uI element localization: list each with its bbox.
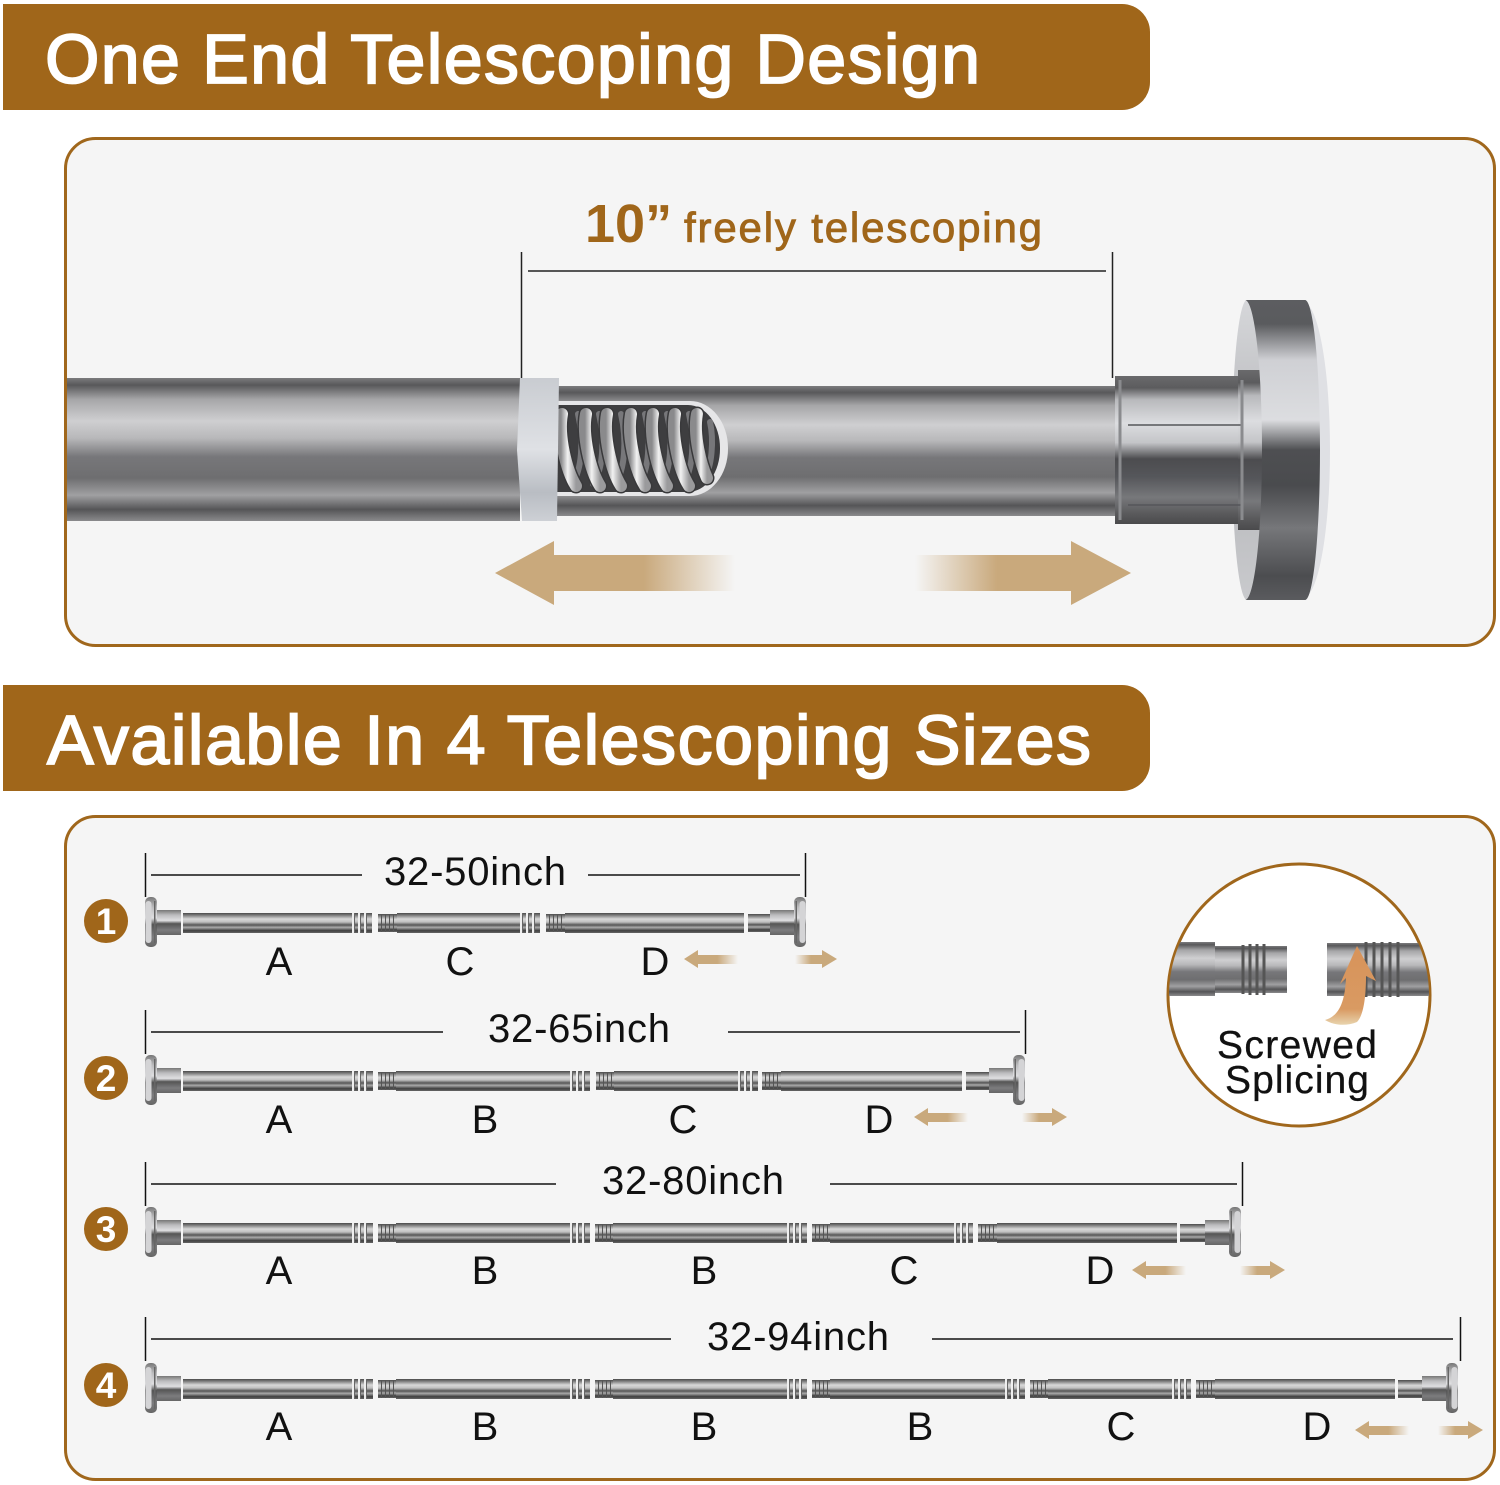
- header banner: Available In 4 Telescoping Sizes: Available In 4 Telescoping Sizes: [47, 701, 1091, 779]
- badge 3: [84, 1207, 128, 1251]
- part letters 4: B: [691, 1405, 717, 1449]
- dimension line 2: [146, 1007, 1026, 1054]
- part letters 4: D: [1303, 1405, 1331, 1449]
- dimension line 4: [146, 1315, 1460, 1361]
- panel: four sizes: [66, 816, 1494, 1480]
- size 4: 32-94 inch: [84, 1315, 1483, 1449]
- badge 2: [84, 1056, 128, 1100]
- part letters 4: A: [266, 1405, 293, 1449]
- part letters 4: [266, 1405, 1331, 1449]
- part letters 2: A: [266, 1098, 293, 1142]
- dimension line 1: 32-50inch: [384, 850, 566, 894]
- callout text: Screwed: [1217, 1024, 1377, 1067]
- callout text: [1217, 1024, 1377, 1102]
- part letters 3: [266, 1249, 1114, 1293]
- spring window: [557, 401, 728, 496]
- size 3: 32-80 inch: [84, 1159, 1285, 1293]
- callout: screwed splicing: [1165, 864, 1437, 1126]
- part letters 1: [266, 940, 669, 984]
- part letters 3: C: [890, 1249, 918, 1293]
- dimension bracket: [522, 252, 1112, 378]
- rod 2: [145, 1055, 1025, 1105]
- part letters 4: B: [472, 1405, 498, 1449]
- part letters 3: B: [691, 1249, 717, 1293]
- double arrow 1: [684, 950, 837, 968]
- rod 1: [145, 897, 806, 947]
- dimension line 4: 32-94inch: [707, 1315, 889, 1359]
- twist arrow: [1325, 946, 1376, 1025]
- badge 4: 4: [96, 1365, 117, 1406]
- part letters 1: A: [266, 940, 293, 984]
- telescoping label: 10”: [585, 194, 672, 254]
- double arrow 4: [1355, 1421, 1483, 1439]
- part letters 3: A: [266, 1249, 293, 1293]
- left arrow: [495, 541, 735, 605]
- part letters 4: B: [907, 1405, 933, 1449]
- double arrow 3: [1132, 1261, 1285, 1279]
- rod 4: [145, 1363, 1458, 1413]
- callout text: Splicing: [1225, 1059, 1369, 1102]
- dimension line 3: [146, 1159, 1242, 1206]
- badge 4: [84, 1363, 128, 1407]
- part letters 1: C: [446, 940, 474, 984]
- end cap of large rod: [1115, 300, 1330, 600]
- badge 3: 3: [96, 1209, 116, 1250]
- size 2: 32-65 inch: [84, 1007, 1067, 1142]
- part letters 4: C: [1107, 1405, 1135, 1449]
- part letters 2: D: [865, 1098, 893, 1142]
- right arrow: [915, 541, 1131, 605]
- telescoping label: freely telescoping: [684, 204, 1042, 251]
- part letters 2: B: [472, 1098, 498, 1142]
- clear sleeve: [517, 378, 559, 521]
- large rod with spring window: [67, 378, 1116, 521]
- part letters 2: C: [669, 1098, 697, 1142]
- dimension line 1: [146, 850, 806, 897]
- rod 3: [145, 1207, 1241, 1257]
- splice joint illustration: [1165, 942, 1437, 997]
- part letters 3: D: [1086, 1249, 1114, 1293]
- badge 2: 2: [96, 1058, 116, 1099]
- badge 1: 1: [96, 901, 116, 942]
- telescoping label: [585, 194, 1042, 254]
- badge 1: [84, 899, 128, 943]
- double arrow 2: [914, 1108, 1067, 1126]
- header banner: One End Telescoping Design: One End Telescoping Design: [45, 20, 980, 98]
- part letters 1: D: [641, 940, 669, 984]
- part letters 2: [266, 1098, 893, 1142]
- dimension line 2: 32-65inch: [488, 1007, 670, 1051]
- dimension line 3: 32-80inch: [602, 1159, 784, 1203]
- panel: one end telescoping detail: [66, 138, 1494, 646]
- size 1: 32-50 inch: [84, 850, 837, 984]
- header banner: Available In 4 Telescoping Sizes: [3, 685, 1150, 791]
- part letters 3: B: [472, 1249, 498, 1293]
- header banner: One End Telescoping Design: [3, 4, 1150, 110]
